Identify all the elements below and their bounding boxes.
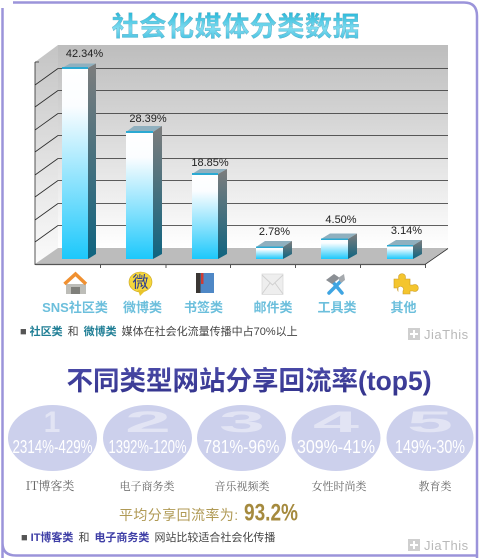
oval captions: 电子商务类 [120,478,174,494]
bar: 18.85% [191,157,229,259]
oval 3: 3 [219,406,265,439]
bar: 42.34%: 42.34% [66,48,103,60]
oval 5: 5 [407,406,453,439]
oval captions [26,477,452,494]
ranking ovals [8,405,474,471]
oval captions: 女性时尚类 [312,478,366,494]
bar: 3.14%: 3.14% [391,225,422,237]
bar: 42.34% [62,48,103,259]
chart left wall [35,45,58,264]
icon: bookmark book [196,273,214,293]
icon: mail envelope [262,274,283,294]
bar: 4.50%: 4.50% [325,214,357,226]
bar: 3.14% [387,225,422,259]
note: community and weibo: ■ 社区类 和 微博类 媒体在社会化流量传播中占70%以上 [20,324,298,338]
oval captions: 音乐视频类 [214,478,270,494]
oval 3 [197,405,286,471]
oval 1 [8,405,97,471]
heading: share return rate top5: 不同类型网站分享回流率(top5) [66,366,432,396]
note: IT blogs and e-commerce: ■ IT博客类 和 电子商务类 网站比较适合社会化传播 [21,530,275,544]
chart floor [35,248,448,264]
icon: tools [326,274,345,293]
category labels: 其他 [390,300,417,315]
oval 5 [386,405,474,471]
bar: 2.78% [256,226,292,259]
oval captions: 教育类 [418,478,452,494]
category labels: 书签类 [184,300,223,315]
chart back wall [58,45,448,248]
oval 1: 1 [44,406,60,439]
logo: JiaThis lower: JiaThis [424,538,469,553]
average return rate: 平均分享回流率为: [119,507,238,523]
bar: 28.39% [126,113,167,259]
category labels: SNS社区类 [42,300,108,315]
oval 2: 2 [125,406,171,439]
category labels: 微博类 [123,300,162,315]
average return rate: 93.2% [244,500,298,526]
average return rate [119,500,298,526]
oval 4: 4 [313,406,360,439]
icon: weibo bubble [129,272,152,296]
bar: 4.50% [321,214,357,259]
category labels [42,300,417,315]
bar: 28.39%: 28.39% [129,113,167,125]
title: social media category data: 社会化媒体分类数据 [112,12,360,42]
oval captions: IT博客类 [26,477,74,494]
category labels: 邮件类 [253,300,293,315]
icon: weibo bubble: 微 [132,274,149,292]
oval 2 [103,405,192,471]
oval 1: 2314%-429% [12,437,92,457]
chart grid lines [35,62,448,268]
oval 4: 309%-41% [297,437,375,457]
logo: JiaThis upper: JiaThis [424,327,469,342]
3D bar chart [35,45,448,268]
bar: 2.78%: 2.78% [259,226,290,238]
icon: puzzle piece [394,274,418,294]
bar: 18.85%: 18.85% [191,157,229,169]
oval 2: 1392%-120% [108,437,186,457]
oval 3: 781%-96% [204,437,280,457]
category labels: 工具类 [317,300,357,315]
oval 4 [292,405,380,471]
icon: home [64,274,86,294]
